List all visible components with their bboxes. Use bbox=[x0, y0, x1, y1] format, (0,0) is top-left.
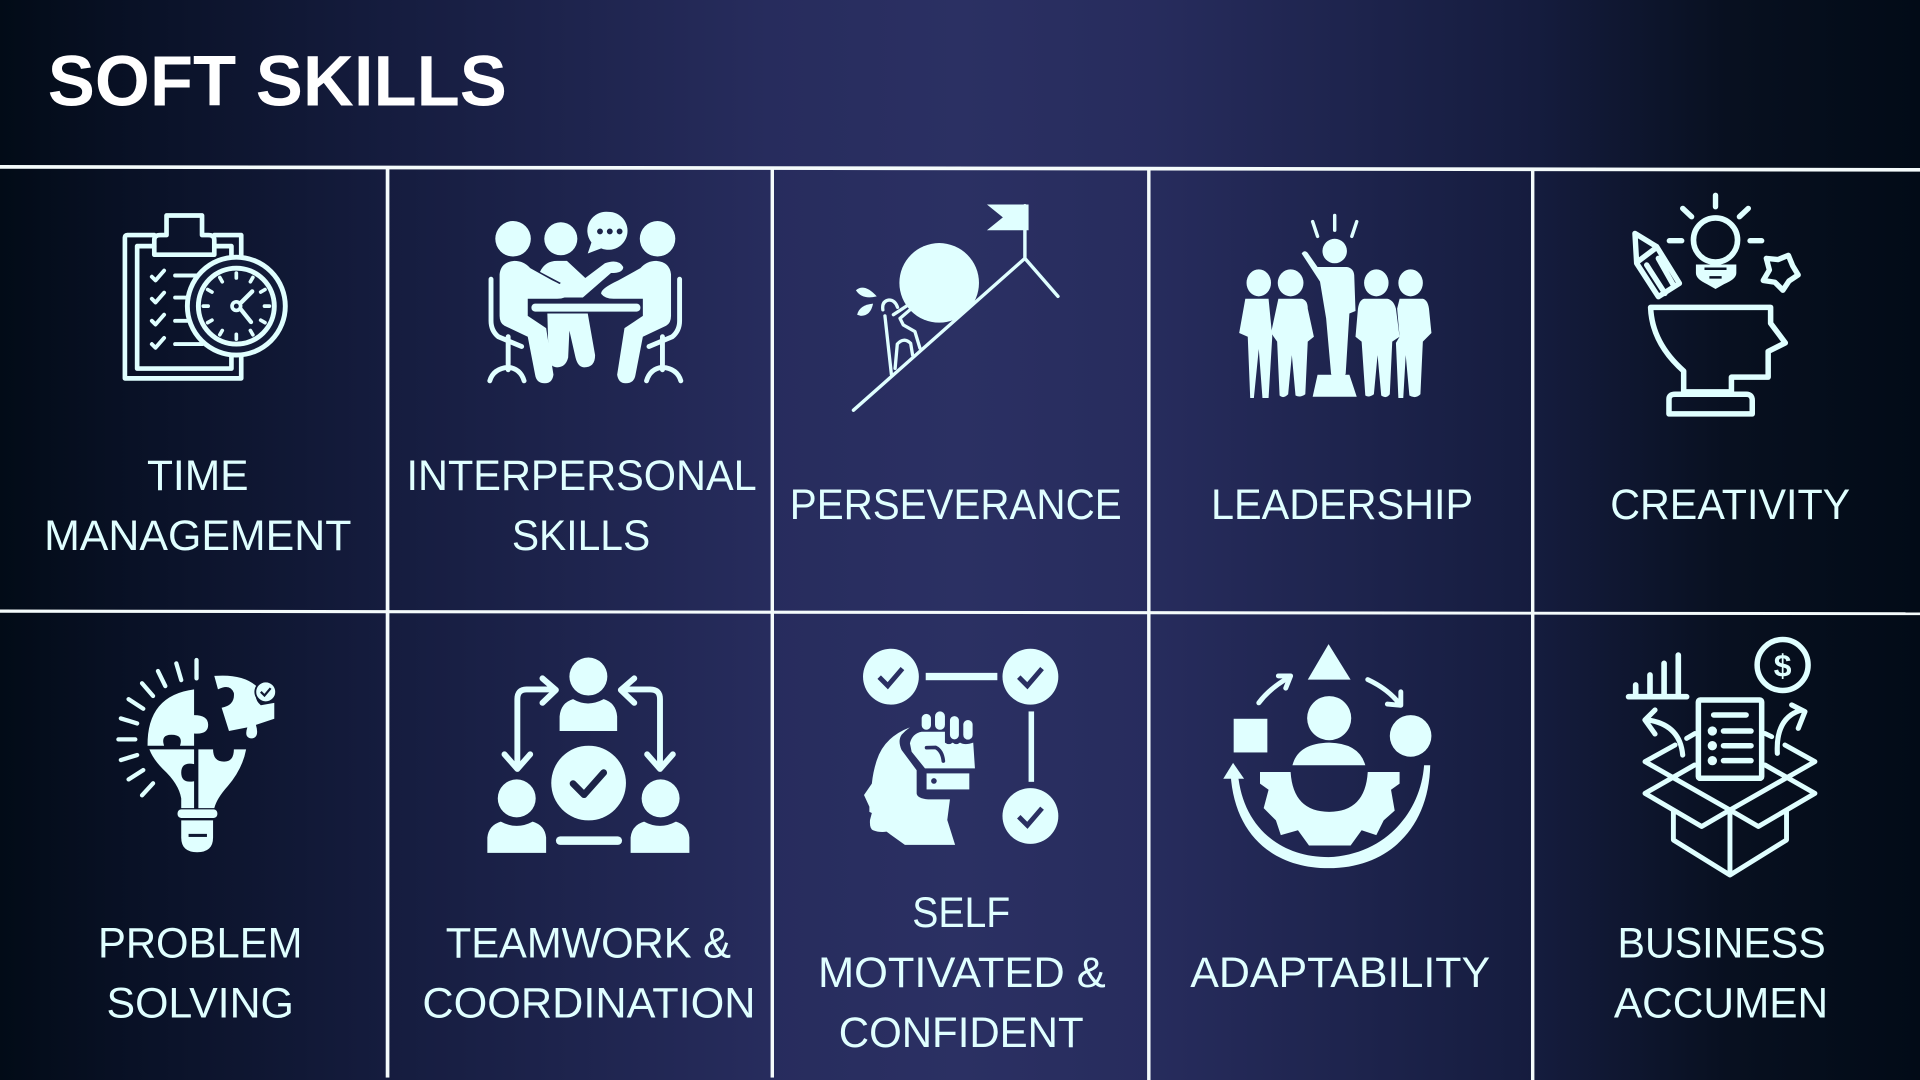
panel: problem solving bbox=[0, 613, 386, 1080]
label: self motivated and confident: CONFIDENT bbox=[839, 1010, 1084, 1057]
label: interpersonal skills bbox=[407, 453, 757, 560]
label: creativity: CREATIVITY bbox=[1610, 482, 1850, 529]
label: interpersonal skills: INTERPERSONAL bbox=[407, 453, 757, 500]
panel: teamwork and coordination bbox=[389, 613, 770, 1080]
icon: puzzle light bulb bbox=[118, 660, 276, 852]
label: interpersonal skills: SKILLS bbox=[512, 513, 650, 560]
label: business acumen bbox=[1614, 921, 1828, 1028]
four team members bbox=[1239, 269, 1431, 398]
panel: business acumen bbox=[1534, 613, 1920, 1080]
icon: box with document, chart and dollar: $ bbox=[1774, 648, 1792, 684]
label: problem solving bbox=[98, 921, 302, 1028]
label: perseverance: PERSEVERANCE bbox=[790, 482, 1122, 529]
panel: time management bbox=[0, 169, 386, 611]
icon: people at a table bbox=[490, 212, 681, 383]
icon: adaptability gear and shapes bbox=[1223, 644, 1431, 868]
icon: clipboard with clock bbox=[125, 216, 285, 378]
label: self motivated and confident: SELF bbox=[912, 890, 1010, 937]
right person bbox=[601, 261, 671, 383]
icon: head with bulb, pencil and star bbox=[1635, 195, 1798, 414]
label: business acumen: BUSINESS bbox=[1618, 921, 1826, 968]
label: leadership: LEADERSHIP bbox=[1211, 482, 1473, 529]
panel: perseverance bbox=[774, 169, 1147, 611]
label: teamwork and coordination: TEAMWORK & bbox=[446, 921, 731, 968]
label: business acumen: ACCUMEN bbox=[1614, 981, 1828, 1028]
label: time management bbox=[44, 453, 351, 560]
panel: creativity bbox=[1534, 169, 1920, 611]
panel: leadership bbox=[1151, 169, 1531, 611]
label: teamwork and coordination: COORDINATION bbox=[422, 981, 756, 1028]
label: problem solving: PROBLEM bbox=[98, 921, 302, 968]
label: self motivated and confident: MOTIVATED & bbox=[818, 950, 1106, 997]
icon: box with document, chart and dollar bbox=[1629, 640, 1815, 875]
middle person bbox=[540, 261, 623, 298]
table bbox=[531, 304, 640, 312]
icon: team around a check mark bbox=[487, 658, 689, 853]
icon: person pushing a boulder up a slope bbox=[853, 204, 1058, 410]
label: teamwork and coordination bbox=[422, 921, 756, 1028]
icon: leader with raised arm among team bbox=[1239, 216, 1431, 398]
label: problem solving: SOLVING bbox=[107, 981, 294, 1028]
label: time management: MANAGEMENT bbox=[44, 513, 351, 560]
icon: head with fist and checklist bbox=[863, 649, 1058, 845]
panel: interpersonal skills bbox=[389, 169, 770, 611]
label: self motivated and confident bbox=[818, 890, 1106, 1057]
panel: adaptability bbox=[1151, 613, 1531, 1080]
label: time management: TIME bbox=[147, 453, 249, 500]
left person bbox=[500, 261, 569, 383]
title: SOFT SKILLS bbox=[48, 42, 507, 121]
panel: self motivated and confident bbox=[774, 613, 1147, 1080]
label: adaptability: ADAPTABILITY bbox=[1190, 950, 1490, 997]
